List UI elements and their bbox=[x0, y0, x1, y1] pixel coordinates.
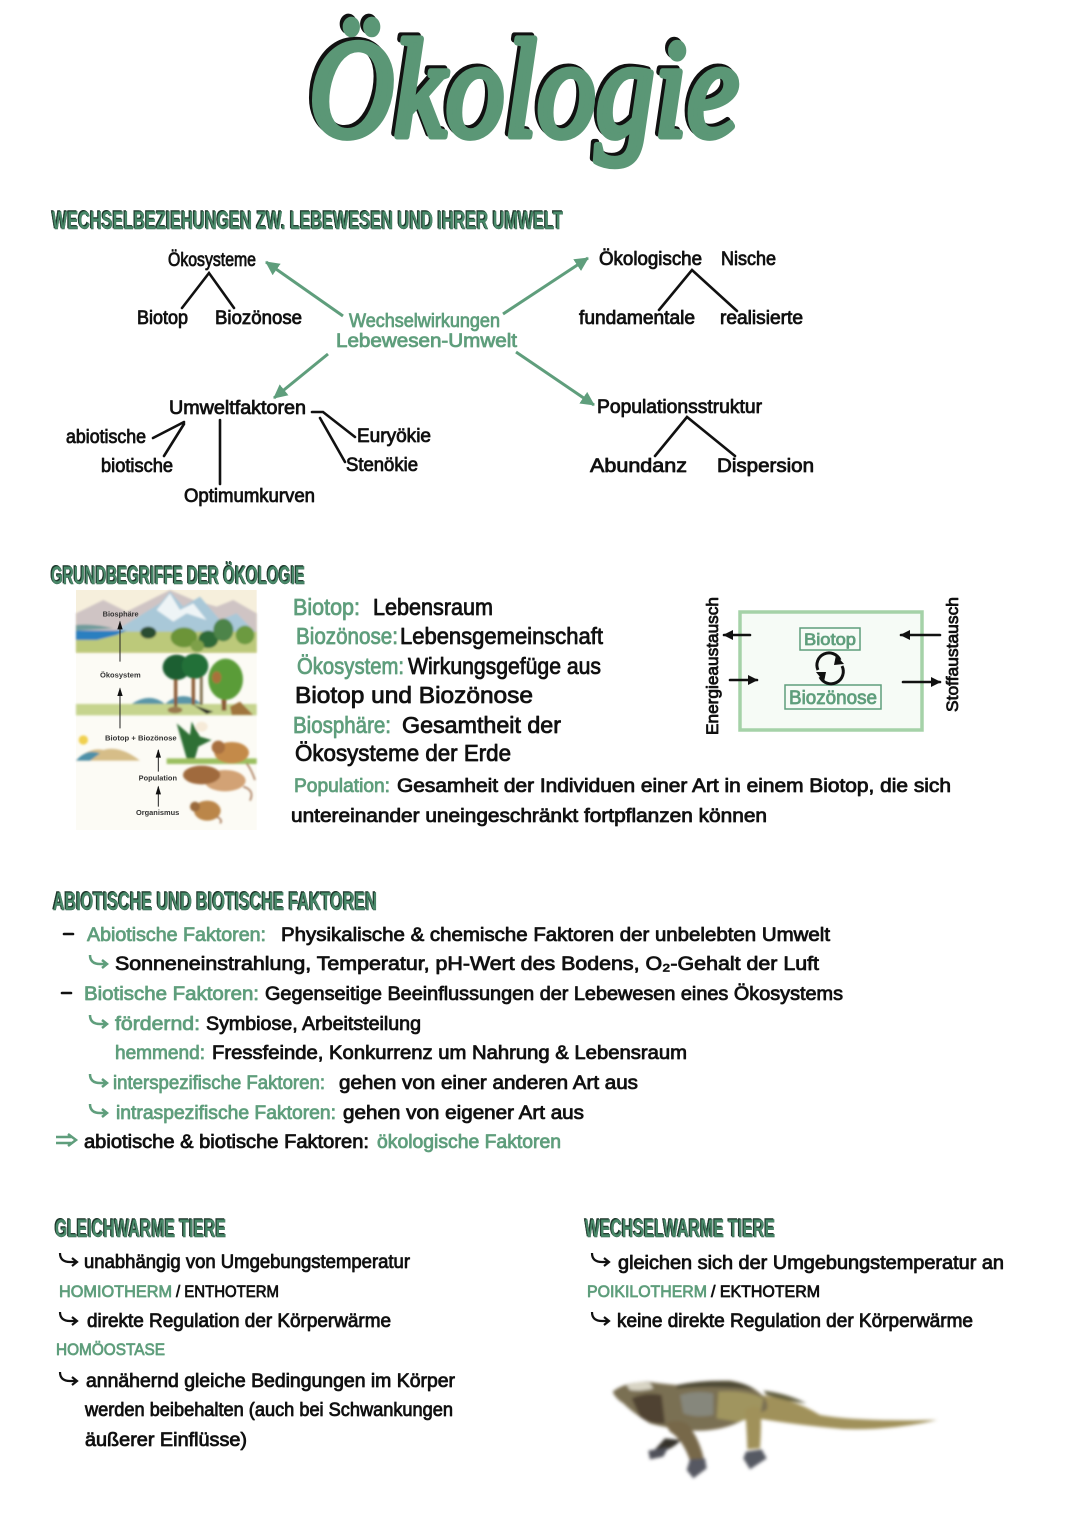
branch: Umweltfaktoren: biotische bbox=[101, 456, 173, 477]
branch: Umweltfaktoren: Optimumkurven bbox=[184, 486, 315, 507]
branch: Ökosysteme bbox=[137, 250, 302, 329]
definition: Ökosystem: Ökosystem: bbox=[297, 653, 404, 679]
illustration: ecological levels: Organismus bbox=[136, 808, 179, 817]
branch: Populationsstruktur bbox=[590, 397, 814, 477]
line: abiotische Faktoren: Physikalische & chemische Faktoren der unbelebten Umwelt bbox=[281, 925, 831, 946]
branch: Ökologische Nische: fundamentale bbox=[579, 308, 695, 329]
line: ökologische Faktoren: ökologische Faktoren bbox=[377, 1132, 561, 1153]
line: abiotische Faktoren: Abiotische Faktoren: bbox=[87, 925, 266, 946]
line: hemmend: Fressfeinde, Konkurrenz um Nahrung & Lebensraum bbox=[212, 1043, 687, 1064]
list: wechselwarme Tiere: / EKTHOTERM bbox=[711, 1282, 820, 1301]
list: wechselwarme Tiere bbox=[587, 1253, 1004, 1332]
definition: Biosphäre: Biosphäre: bbox=[293, 712, 391, 738]
branch: Ökologische Nische bbox=[579, 249, 803, 329]
diagram: ecosystem exchange: Biozönose bbox=[789, 688, 877, 709]
section: wechselwarme Tiere bbox=[585, 1215, 1004, 1478]
definition: Biotop bbox=[293, 594, 493, 620]
center label: Wechselwirkungen bbox=[336, 311, 518, 352]
diagram: ecosystem exchange: Energieaustausch bbox=[703, 597, 722, 735]
definition: Ökosystem: Wirkungsgefüge aus bbox=[408, 653, 601, 679]
list: gleichwarme Tiere: annähernd gleiche Bedingungen im Körper bbox=[86, 1371, 456, 1392]
list: gleichwarme Tiere: HOMIOTHERM bbox=[59, 1282, 172, 1301]
heading: Grundbegriffe: GRUNDBEGRIFFE DER ÖKOLOGIE bbox=[51, 561, 305, 590]
line: Sonneneinstrahlung: Sonneneinstrahlung, Temperatur, pH-Wert des Bodens, O₂-Gehalt der Luft bbox=[115, 954, 820, 975]
line: fördernd: fördernd: bbox=[115, 1014, 200, 1035]
branch: Ökosysteme: Biotop bbox=[137, 308, 188, 329]
line: intraspezifische Faktoren bbox=[90, 1103, 584, 1124]
diagram: ecosystem exchange: Biotop bbox=[804, 630, 856, 649]
line: biotische Faktoren: Biotische Faktoren: bbox=[84, 984, 259, 1005]
branch: Populationsstruktur: Populationsstruktur bbox=[597, 397, 763, 418]
section: abiotische und biotische Faktoren bbox=[53, 888, 843, 1153]
branch: Populationsstruktur: Dispersion bbox=[717, 456, 814, 477]
illustration: ecological levels bbox=[76, 590, 257, 830]
line: interspezifische Faktoren bbox=[90, 1073, 638, 1094]
line: abiotische Faktoren bbox=[64, 925, 831, 946]
diagram: ecosystem exchange: Stoffaustausch bbox=[943, 597, 962, 712]
illustration: iguana bbox=[613, 1381, 937, 1478]
list: gleichwarme Tiere: / ENTHOTERM bbox=[176, 1282, 279, 1301]
line: ökologische Faktoren: abiotische & biotische Faktoren: bbox=[84, 1132, 369, 1153]
list: gleichwarme Tiere: HOMÖOSTASE bbox=[56, 1340, 165, 1359]
line: ökologische Faktoren bbox=[56, 1132, 561, 1153]
definition: Biotop: Lebensraum bbox=[373, 594, 493, 620]
list: wechselwarme Tiere: POIKILOTHERM bbox=[587, 1282, 707, 1301]
illustration: ecological levels: Biosphäre bbox=[103, 610, 139, 619]
definition: Biosphäre: Ökosysteme der Erde bbox=[295, 740, 511, 766]
branch: Umweltfaktoren: Umweltfaktoren bbox=[169, 398, 306, 419]
definition: Population bbox=[291, 776, 951, 827]
definition: Population: Population: bbox=[294, 776, 390, 797]
branch: Ökologische Nische: Ökologische bbox=[599, 249, 702, 270]
list: gleichwarme Tiere: unabhängig von Umgebungstemperatur bbox=[84, 1252, 411, 1273]
list: wechselwarme Tiere: gleichen sich der Umgebungstemperatur an bbox=[618, 1253, 1004, 1274]
illustration: ecological levels: Ökosystem bbox=[100, 670, 141, 679]
definition: Ökosystem: Biotop und Biozönose bbox=[295, 682, 533, 708]
line: intraspezifische Faktoren: intraspezifische Faktoren: bbox=[116, 1103, 336, 1124]
branch: Ökosysteme: Biozönose bbox=[215, 308, 302, 329]
branch: Umweltfaktoren bbox=[66, 398, 431, 507]
illustration: ecological levels: Population bbox=[139, 774, 177, 783]
definition: Population: untereinander uneingeschränkt fortpflanzen können bbox=[291, 806, 767, 827]
list: wechselwarme Tiere: keine direkte Regulation der Körperwärme bbox=[617, 1311, 973, 1332]
branch: Umweltfaktoren: Stenökie bbox=[346, 455, 418, 476]
line: biotische Faktoren: Gegenseitige Beeinflussungen der Lebewesen eines Ökosystems bbox=[265, 984, 843, 1005]
list: gleichwarme Tiere bbox=[56, 1252, 456, 1451]
branch: Ökologische Nische: Nische bbox=[721, 249, 776, 270]
line: fördernd: Symbiose, Arbeitsteilung bbox=[206, 1014, 421, 1035]
line: interspezifische Faktoren: gehen von einer anderen Art aus bbox=[339, 1073, 638, 1094]
heading: wechselwarme Tiere: WECHSELWARME TIERE bbox=[585, 1215, 775, 1243]
branch: Ökosysteme: Ökosysteme bbox=[168, 250, 256, 271]
definition: Biosphäre: Gesamtheit der bbox=[402, 712, 561, 738]
center label: Wechselwirkungen: Wechselwirkungen bbox=[349, 311, 500, 332]
line: fördernd bbox=[90, 1014, 421, 1035]
heading: Faktoren: ABIOTISCHE UND BIOTISCHE FAKTOREN bbox=[53, 888, 377, 916]
list: gleichwarme Tiere: direkte Regulation der Körperwärme bbox=[87, 1311, 391, 1332]
definition: Biosphäre bbox=[293, 712, 561, 766]
line: intraspezifische Faktoren: gehen von eigener Art aus bbox=[343, 1103, 584, 1124]
definition: Biozönose bbox=[296, 623, 604, 649]
line: interspezifische Faktoren: interspezifische Faktoren: bbox=[113, 1073, 325, 1094]
list: gleichwarme Tiere: äußerer Einflüsse) bbox=[85, 1430, 247, 1451]
definition: Population: Gesamheit der Individuen einer Art in einem Biotop, die sich bbox=[397, 776, 951, 797]
heading: gleichwarme Tiere: GLEICHWARME TIERE bbox=[55, 1215, 226, 1243]
arrows: center to branches bbox=[266, 258, 594, 405]
line: hemmend: hemmend: bbox=[115, 1043, 205, 1064]
branch: Umweltfaktoren: Euryökie bbox=[357, 426, 431, 447]
definition: Biotop: Biotop: bbox=[293, 594, 360, 620]
definition: Biozönose: Biozönose: bbox=[296, 623, 398, 649]
section: Grundbegriffe bbox=[51, 561, 962, 830]
diagram: ecosystem exchange bbox=[703, 597, 962, 735]
heading: Wechselbeziehungen: WECHSELBEZIEHUNGEN ZW. LEBEWESEN UND IHRER UMWELT bbox=[52, 207, 563, 235]
definition: Biozönose: Lebensgemeinschaft bbox=[400, 623, 604, 649]
section: Wechselbeziehungen bbox=[52, 207, 814, 507]
branch: Umweltfaktoren: abiotische bbox=[66, 427, 146, 448]
definition: Ökosystem bbox=[295, 653, 601, 708]
section: gleichwarme Tiere bbox=[55, 1215, 456, 1451]
branch: Populationsstruktur: Abundanz bbox=[590, 456, 687, 477]
list: gleichwarme Tiere: werden beibehalten (auch bei Schwankungen bbox=[84, 1400, 453, 1421]
center label: Wechselwirkungen: Lebewesen-Umwelt bbox=[336, 331, 518, 352]
illustration: ecological levels: Biotop + Biozönose bbox=[105, 734, 177, 743]
branch: Ökologische Nische: realisierte bbox=[720, 308, 803, 329]
title: Ökologie bbox=[309, 12, 739, 167]
